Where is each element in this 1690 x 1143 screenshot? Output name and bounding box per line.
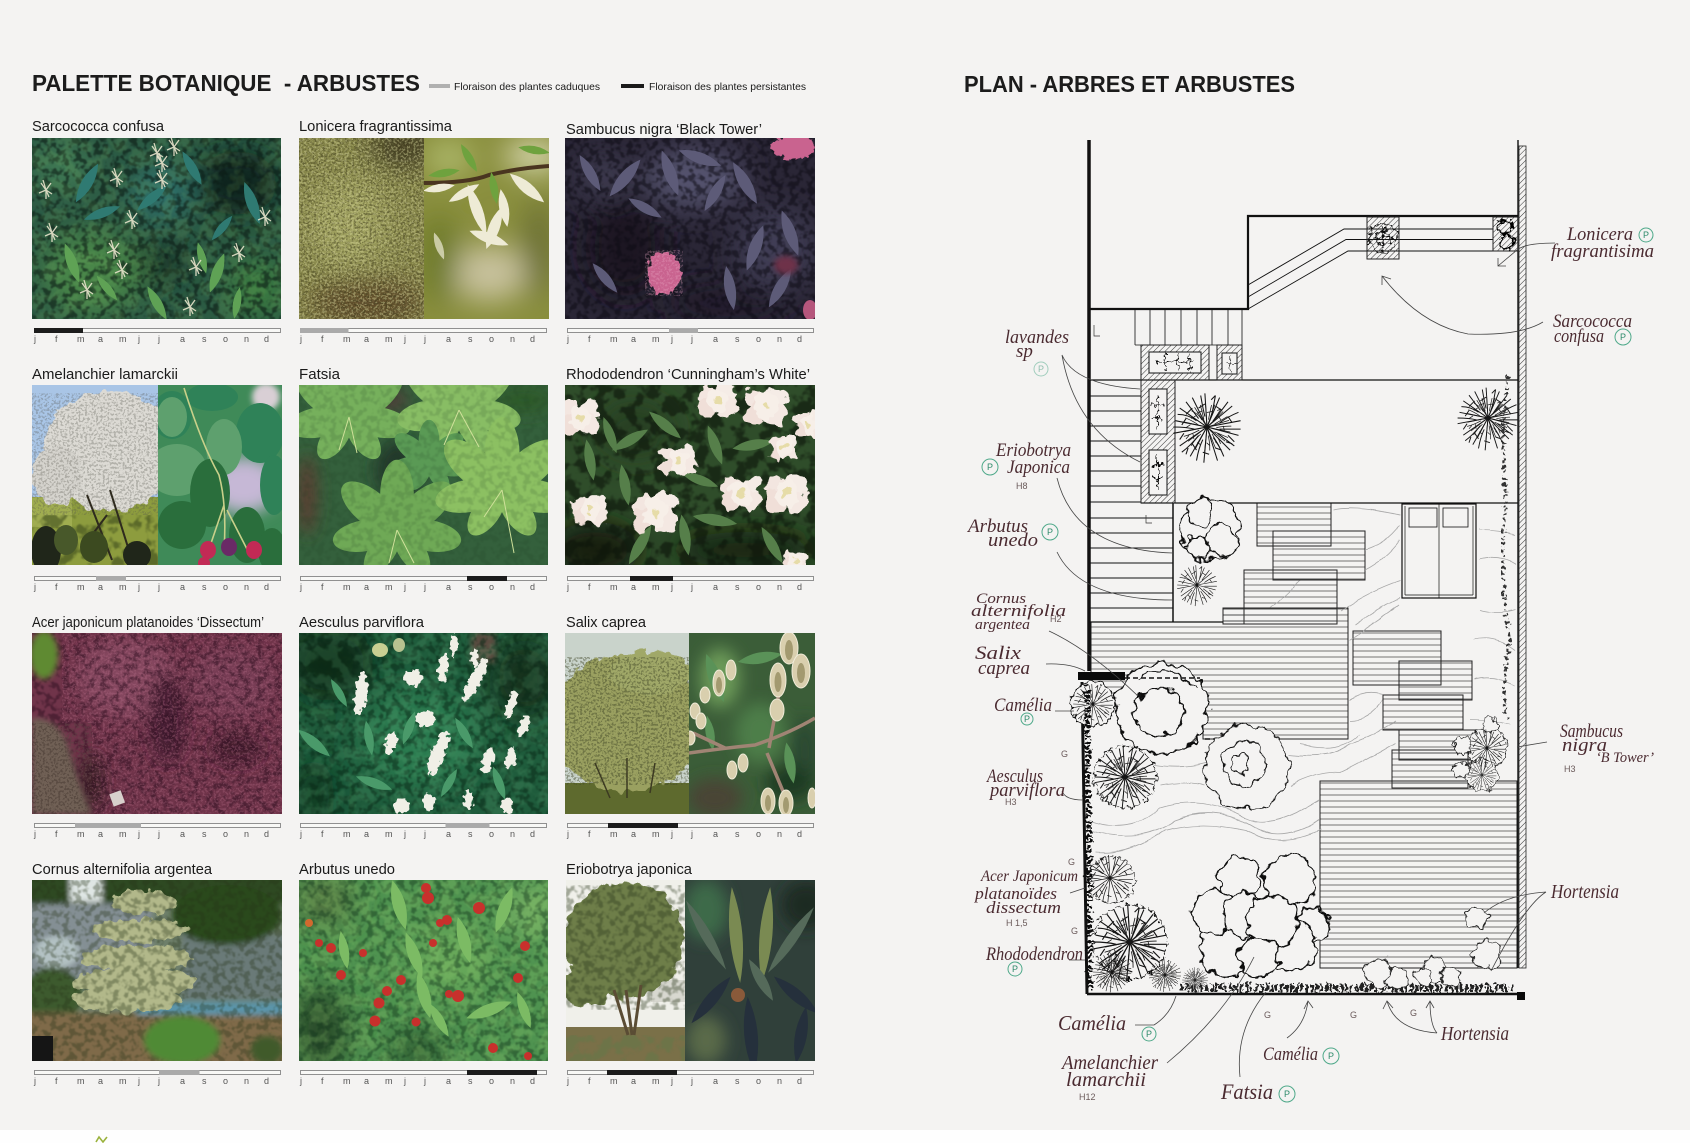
hatched planters (1141, 217, 1518, 503)
photo (32, 880, 282, 1061)
label: Acer japonicum (974, 868, 1078, 928)
shrub: arbutus lower (1177, 565, 1217, 606)
photo (565, 633, 815, 814)
small wall marks (1094, 325, 1152, 523)
label: Cornus alternifolia argentea: alternifolia (971, 601, 1066, 620)
label: Acer japonicum: Acer Japonicum (980, 868, 1078, 885)
label: Lonicera fragrantissima: fragrantisima (1551, 241, 1654, 262)
spiky shrub: left (1173, 393, 1241, 463)
ground cover marks G: G (1264, 1010, 1271, 1020)
sambucus shrub (1453, 717, 1507, 791)
label: Cornus alternifolia argentea: Cornus (976, 591, 1026, 607)
label: Arbutus unedo: Arbutus (966, 516, 1028, 537)
ground cover marks G (1061, 749, 1417, 1020)
label: Camelia middle: P (1328, 1051, 1334, 1061)
shrub: lonicera planter (1498, 220, 1514, 249)
spiky shrub: right (1458, 388, 1518, 450)
flowering bar (300, 1070, 546, 1075)
photo (565, 385, 815, 565)
months: jfmamjjasond (299, 829, 535, 839)
label: lavandes: P (1038, 364, 1044, 374)
flowering bar (300, 576, 546, 581)
ground cover marks G: G (1061, 749, 1068, 759)
panel: Arbutus unedo (289, 862, 559, 1086)
tree: amelanchier cluster (1191, 854, 1330, 977)
shrub: leafy aesculus (1094, 746, 1156, 809)
hortensia bottom shrubs (1366, 957, 1460, 989)
hatched right wall (1519, 146, 1526, 968)
label: Sarcococca confusa: P (1620, 332, 1626, 342)
label: Sambucus nigra: H3 (1564, 764, 1576, 774)
name: Acer japonicum platanoides ‘Dissectum’ (32, 615, 264, 631)
label: Amelanchier lamarckii (1060, 1052, 1158, 1102)
label: Cornus alternifolia argentea: H2 (1050, 614, 1062, 624)
tree: arbutus (1180, 499, 1240, 560)
label: Eriobotrya japonica: Japonica (1007, 457, 1070, 478)
legend: evergreen label: Floraison des plantes persistantes (649, 81, 806, 93)
photo (32, 633, 282, 814)
label: Rhododendron (985, 944, 1083, 976)
legend: deciduous label: Floraison des plantes caduques (454, 81, 600, 93)
label: Camelia (994, 695, 1052, 725)
label: Camelia bottom: P (1146, 1029, 1152, 1039)
label: Sarcococca confusa: confusa (1554, 326, 1604, 347)
label: Sarcococca confusa (1553, 311, 1632, 347)
label: Salix caprea: caprea (978, 658, 1030, 679)
panel: Rhododendron Cunningham's White (550, 367, 825, 592)
climbing hedge right (1503, 375, 1510, 720)
black threshold block (1078, 672, 1125, 680)
label: Cornus alternifolia argentea (971, 591, 1066, 633)
label: Hortensia bottom: Hortensia (1440, 1023, 1509, 1045)
months: jfmamjjasond (566, 1076, 802, 1086)
name: Salix caprea (566, 615, 647, 631)
photo (565, 138, 815, 319)
plan drawing (966, 140, 1654, 1104)
planter interiors with lavender (1149, 352, 1237, 495)
photo (32, 138, 281, 319)
photo (566, 880, 815, 1061)
months: jfmamjjasond (566, 582, 802, 592)
legend: evergreen swatch (621, 84, 644, 88)
label: Sambucus nigra (1560, 721, 1654, 774)
wooden decks (1091, 503, 1517, 968)
label: Rhododendron: P (1012, 964, 1018, 974)
panel: Amelanchier lamarckii (31, 367, 288, 592)
months: jfmamjjasond (566, 334, 802, 344)
lavender plants (1152, 354, 1235, 490)
ground cover marks G: G (1410, 1008, 1417, 1018)
bottom hedge (1180, 984, 1515, 992)
photo (299, 880, 548, 1061)
label: Aesculus parviflora: H3 (1005, 797, 1017, 807)
label: Amelanchier lamarckii: Amelanchier (1060, 1052, 1158, 1074)
panel: Sambucus nigra Black Tower (565, 122, 817, 344)
panel: Aesculus parviflora (284, 615, 559, 839)
flowering bar (34, 576, 280, 581)
label: Camelia bottom (1058, 1011, 1156, 1041)
label: Rhododendron: Rhododendron (985, 944, 1083, 965)
flowering bar (568, 576, 814, 581)
photo (299, 138, 549, 319)
dashed deck edge (1125, 678, 1280, 739)
months: jfmamjjasond (566, 829, 802, 839)
flowering bar (568, 1070, 814, 1075)
title: palette botanique: PALETTE BOTANIQUE - ARBUSTES (32, 70, 420, 96)
label: Amelanchier lamarckii: lamarchii (1066, 1069, 1146, 1091)
label: Arbutus unedo: unedo (988, 530, 1038, 551)
name: Aesculus parviflora (299, 615, 425, 631)
label: Aesculus parviflora (985, 766, 1065, 807)
name: Fatsia (299, 367, 341, 383)
name: Lonicera fragrantissima (299, 119, 453, 135)
flowering bar (34, 1070, 280, 1075)
panel: Cornus alternifolia argentea (22, 862, 292, 1086)
shrub: camelia (1071, 682, 1115, 726)
months: jfmamjjasond (299, 582, 535, 592)
months: jfmamjjasond (33, 1076, 269, 1086)
flowering bar (568, 328, 814, 333)
bottom white strip (0, 1130, 1690, 1143)
flowering bar (34, 328, 280, 333)
label: Hortensia right: Hortensia (1550, 881, 1619, 903)
label: Eriobotrya japonica (982, 440, 1071, 491)
label: lavandes: sp (1016, 341, 1033, 362)
label: Acer japonicum: platanoïdes (974, 884, 1057, 903)
shrubs: acer (1087, 855, 1135, 903)
ground cover marks G: G (1350, 1010, 1357, 1020)
label: Arbutus unedo (966, 516, 1058, 551)
label: Sambucus nigra: ‘B Tower’ (1596, 750, 1654, 766)
panel: Eriobotrya japonica (563, 862, 831, 1086)
lawn contour lines (1090, 508, 1515, 852)
small green mark (96, 1137, 107, 1142)
label: Fatsia: Fatsia (1220, 1079, 1273, 1104)
label: Sambucus nigra: nigra (1562, 735, 1607, 756)
label: Salix caprea (975, 643, 1030, 679)
tree: aesculus large canopy (1116, 662, 1208, 754)
months: jfmamjjasond (33, 829, 269, 839)
label: Camelia: Camélia (994, 695, 1052, 716)
label: Eriobotrya japonica: P (987, 462, 993, 472)
name: Amelanchier lamarckii (32, 367, 178, 383)
title: plan: PLAN - ARBRES ET ARBUSTES (964, 71, 1295, 97)
flowering bar (34, 823, 280, 828)
label: Arbutus unedo: P (1047, 527, 1053, 537)
label: Camelia bottom: Camélia (1058, 1011, 1126, 1035)
label: Sarcococca confusa: Sarcococca (1553, 311, 1632, 332)
panel: Fatsia (285, 342, 571, 592)
label: Lonicera fragrantissima: Lonicera (1566, 224, 1633, 245)
legend (429, 81, 806, 93)
name: Sarcococca confusa (32, 119, 165, 135)
panel: Lonicera fragrantissima (299, 119, 564, 344)
photo (32, 385, 282, 565)
label: Acer japonicum: H 1,5 (1006, 918, 1028, 928)
hortensia shrubs right (1466, 907, 1501, 969)
name: Arbutus unedo (299, 862, 395, 878)
leader lines (1046, 243, 1555, 1077)
flowering bar (300, 823, 546, 828)
label: Sambucus nigra: Sambucus (1560, 721, 1623, 742)
flowering bar (568, 823, 814, 828)
label: Eriobotrya japonica: Eriobotrya (995, 440, 1071, 461)
label: Salix caprea: Salix (975, 643, 1022, 664)
shrubs: rhododendron dense (1093, 905, 1208, 994)
shrub: sarcococca planter (1369, 224, 1397, 252)
panel: Acer japonicum (30, 615, 282, 839)
label: Aesculus parviflora: parviflora (988, 780, 1065, 801)
label: Lonicera fragrantissima: P (1643, 230, 1649, 240)
photo (299, 385, 548, 565)
walls and structure (1082, 140, 1522, 994)
label: Acer japonicum: dissectum (986, 898, 1061, 917)
months: jfmamjjasond (33, 334, 269, 344)
label: Cornus alternifolia argentea: argentea (975, 617, 1030, 633)
name: Eriobotrya japonica (566, 862, 693, 878)
label: Camelia: P (1024, 714, 1030, 724)
name: Cornus alternifolia argentea (32, 862, 213, 878)
bottom right corner block (1517, 992, 1525, 1000)
label: Eriobotrya japonica: H8 (1016, 481, 1028, 491)
photo (299, 633, 548, 814)
ground cover marks G: G (1071, 926, 1078, 936)
label: lavandes: lavandes (1005, 327, 1069, 348)
label: Fatsia: P (1284, 1089, 1290, 1099)
panel: Sarcococca confusa (32, 119, 287, 344)
left hedge (1087, 690, 1090, 990)
label: Camelia middle: Camélia (1263, 1044, 1318, 1065)
flowering bar (300, 328, 546, 333)
name: Rhododendron ‘Cunningham’s White’ (566, 367, 810, 383)
legend: deciduous swatch (429, 84, 450, 88)
label: lavandes (1005, 327, 1069, 376)
name: Sambucus nigra ‘Black Tower’ (566, 122, 762, 138)
panel: Salix caprea (549, 615, 820, 839)
ground cover marks G: G (1068, 857, 1075, 867)
label: Aesculus parviflora: Aesculus (985, 766, 1043, 787)
label: Amelanchier lamarckii: H12 (1079, 1092, 1096, 1102)
months: jfmamjjasond (299, 1076, 535, 1086)
tree: open canopy (1205, 725, 1289, 809)
months: jfmamjjasond (33, 582, 269, 592)
months: jfmamjjasond (299, 334, 535, 344)
label: Lonicera fragrantissima (1551, 224, 1654, 262)
